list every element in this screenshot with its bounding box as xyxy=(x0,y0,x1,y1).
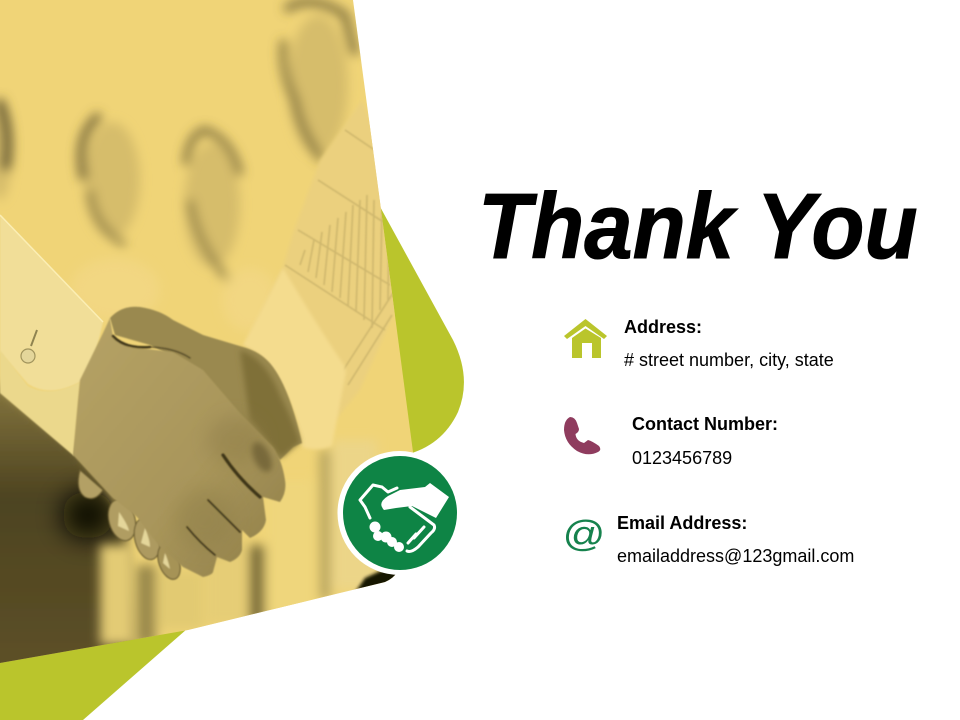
email label: Email Address: xyxy=(617,513,747,533)
accent shape: green triangle bottom xyxy=(0,615,203,720)
blurred people xyxy=(0,2,355,332)
photo: handshake duotone xyxy=(0,0,420,690)
hand shading xyxy=(184,420,254,534)
text block: email address xyxy=(617,513,854,566)
blurred columns below hands xyxy=(100,440,377,645)
accent shape: green rounded triangle right xyxy=(378,203,464,455)
right cuff xyxy=(243,268,346,449)
left sleeve and cuff xyxy=(0,215,103,391)
contact label: Contact Number: xyxy=(632,414,778,434)
address value: # street number, city, state xyxy=(624,350,834,370)
text block: address xyxy=(624,317,834,370)
decorative artwork: photo, accent shapes and badge xyxy=(0,0,464,720)
address label: Address: xyxy=(624,317,702,337)
icon: at sign: @ xyxy=(562,514,605,554)
text block: contact number xyxy=(632,414,778,468)
cufflink button xyxy=(21,349,35,363)
back of main hand xyxy=(73,318,285,577)
icon: handshake xyxy=(360,483,449,552)
dark lower left background xyxy=(0,380,136,663)
icon: phone xyxy=(564,417,600,454)
badge: handshake icon xyxy=(338,451,462,575)
icon: house xyxy=(564,319,607,358)
knuckle creases and thumb shadow xyxy=(113,336,260,555)
contact value: 0123456789 xyxy=(632,448,732,468)
title: Thank You xyxy=(478,174,918,278)
right hand with thumb xyxy=(110,307,302,460)
email value: emailaddress@123gmail.com xyxy=(617,546,854,566)
right sleeve striped xyxy=(284,112,394,386)
lower fingers xyxy=(78,470,185,582)
